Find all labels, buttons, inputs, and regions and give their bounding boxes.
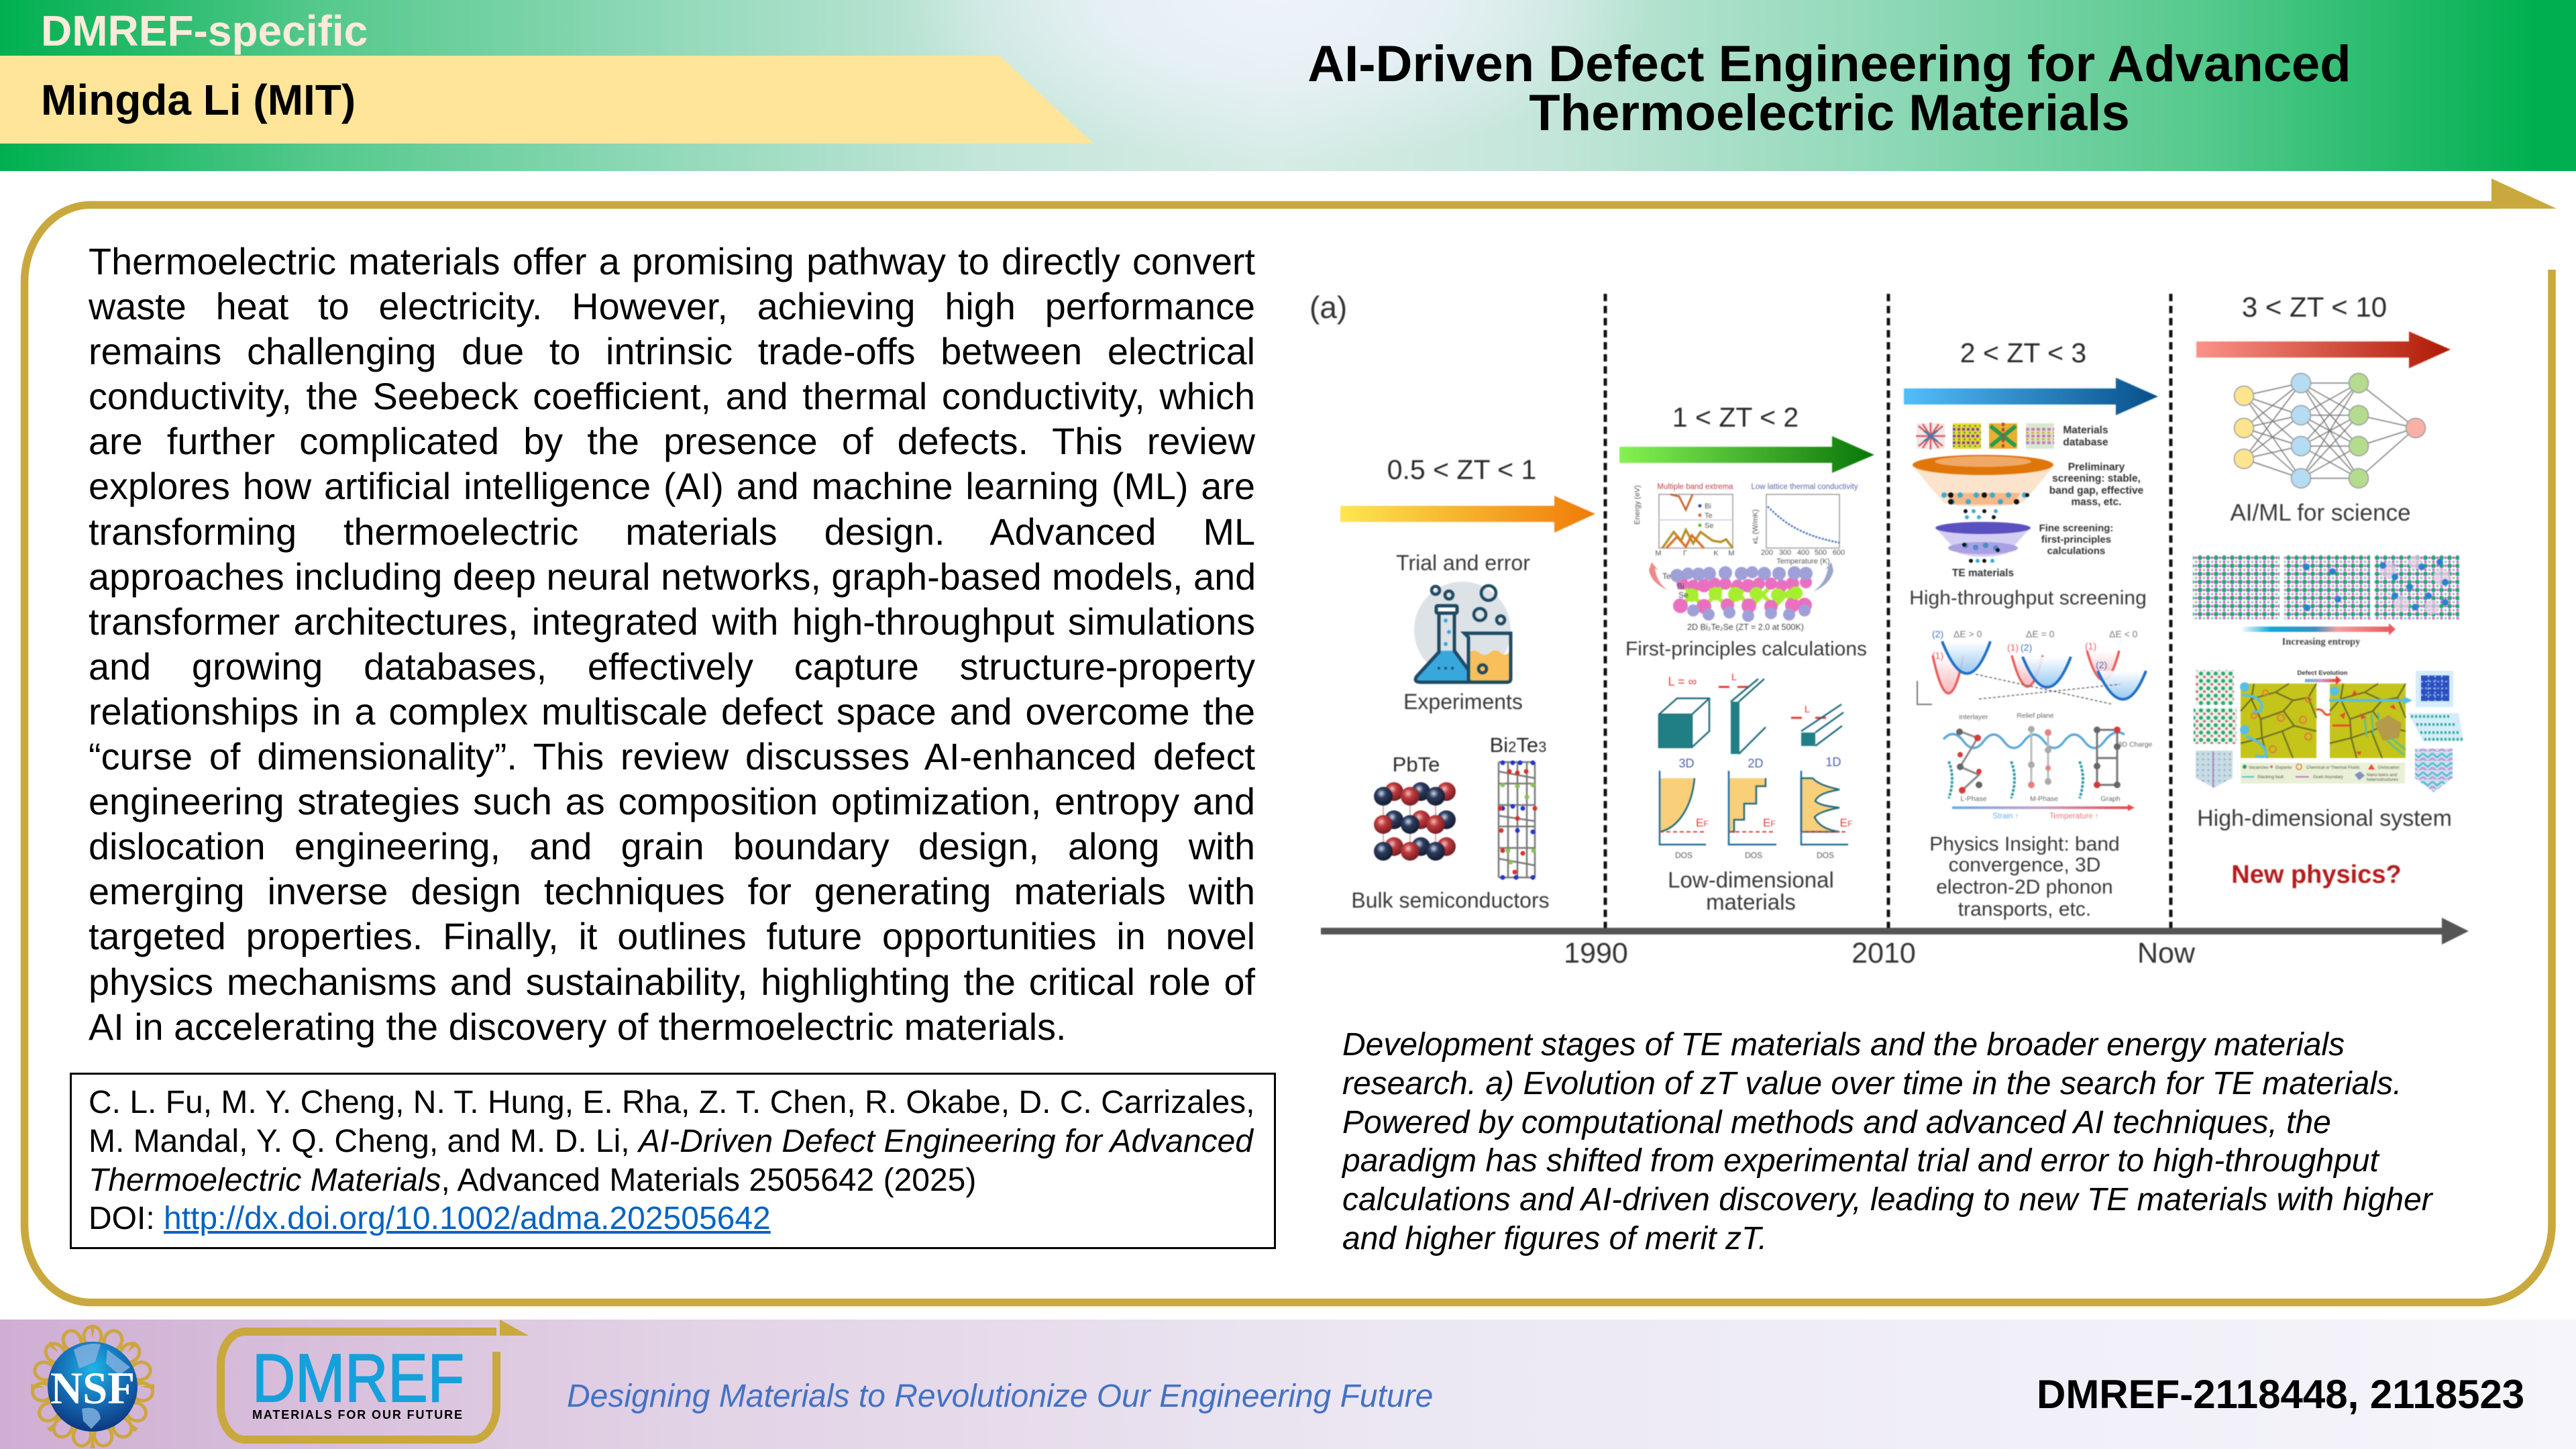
chart: phonon transport chains: L-Phase	[1960, 795, 1987, 803]
label: Bi2Te3: Bi2Te3	[1490, 733, 1546, 757]
footer tagline: Designing Materials to Revolutionize Our Engineering Future	[567, 1379, 1433, 1414]
label: fine screening: calculations	[2047, 545, 2105, 557]
chart: phonon transport chains: M-Phase	[2030, 795, 2058, 803]
title: AI-Driven Defect Engineering for Advanced	[1307, 36, 2351, 93]
arrow: strain and temperature	[1952, 804, 2135, 820]
crystal: 2D Bi2Te2Se structure: Bi	[1677, 582, 1684, 591]
axis years: 2010	[1851, 937, 1916, 969]
chart: DOS 3D: DOS	[1675, 851, 1693, 860]
axis years: Now	[2137, 937, 2196, 969]
icon: 3D bulk: 3D	[1678, 757, 1695, 770]
chart: low lattice thermal conductivity: 600	[1833, 549, 1845, 557]
abstract text block: “curse of dimensionality”. This review discusses AI-enhanced defect	[89, 735, 1255, 777]
label: TE materials: TE materials	[1952, 568, 2014, 579]
chart: low lattice thermal conductivity: 300	[1779, 549, 1791, 557]
era 3: 2 < ZT < 3 arrow: 2 < ZT < 3	[1960, 337, 2086, 368]
abstract text block: explores how artificial intelligence (AI) and machine learning (ML) are	[89, 465, 1255, 507]
chart: DOS 2D: DOS	[1745, 851, 1762, 860]
legend strip: Chemical or Thermal Fluids	[2306, 765, 2360, 770]
era divider lines	[1605, 294, 2171, 929]
chart: phonon transport chains: Relief plane	[2017, 712, 2054, 720]
chart: band convergence parabolas: ΔE > 0	[1953, 629, 1982, 639]
chart: band convergence parabolas: (2)	[2096, 659, 2107, 670]
diagram: right structures	[2408, 671, 2463, 792]
abstract text block: transformer architectures, integrated with high-throughput simulations	[89, 600, 1255, 643]
chart: low lattice thermal conductivity: 200	[1761, 549, 1773, 557]
era 4: 3 < ZT < 10 arrow	[2196, 291, 2451, 368]
label: preliminary screening	[2049, 462, 2144, 508]
chart: band convergence parabolas: (1)	[2085, 641, 2096, 651]
diagram: entropy lattices	[2193, 555, 2459, 620]
presenter band	[0, 56, 1093, 144]
arrow: increasing entropy: Increasing entropy	[2282, 637, 2361, 647]
abstract text block: transforming thermoelectric materials design. Advanced ML	[89, 511, 1255, 553]
icon: DMREF logo: MATERIALS FOR OUR FUTURE	[252, 1408, 462, 1421]
crystal: 2D Bi2Te2Se structure: Te	[1662, 572, 1671, 581]
chart: DOS 3D	[1660, 771, 1709, 860]
era 1: 0.5 < ZT < 1 arrow	[1340, 454, 1595, 533]
chart: multiple band extrema	[1633, 483, 1735, 557]
abstract text block: are further complicated by the presence of defects. This review	[89, 420, 1255, 462]
header highlight glow	[872, 0, 1677, 171]
small arrow: defect evolution: Defect Evolution	[2298, 669, 2348, 677]
caption: 2D structure: 2D Bi₂Te₂Se (ZT = 2.0 at 500K)	[1687, 623, 1804, 632]
label: high-dimensional system: High-dimensional system	[2197, 806, 2452, 831]
label: PbTe: PbTe	[1393, 753, 1440, 776]
title	[1307, 36, 2351, 142]
chart: multiple band extrema: M	[1655, 549, 1662, 557]
chart: DOS 2D: EF	[1763, 816, 1776, 829]
axis years: 1990	[1564, 937, 1628, 969]
chart: multiple band extrema: Γ	[1683, 549, 1687, 557]
award numbers: DMREF-2118448, 2118523	[2037, 1372, 2524, 1417]
citation text: DOI: http://dx.doi.org/10.1002/adma.202505642	[89, 1201, 771, 1236]
crystal: 2D Bi2Te2Se structure: Se	[1678, 590, 1688, 600]
abstract text block: AI in accelerating the discovery of thermoelectric materials.	[89, 1006, 1067, 1048]
label: physics insight: Physics Insight: band	[1929, 833, 2120, 855]
icon: 2D quantum well: 2D	[1748, 757, 1764, 770]
era 1: 0.5 < ZT < 1 arrow: 0.5 < ZT < 1	[1387, 454, 1536, 485]
title: Thermoelectric Materials	[1529, 85, 2130, 142]
chart: band convergence parabolas	[1917, 629, 2146, 704]
legend strip: Stacking fault	[2257, 775, 2284, 780]
label: low-dimensional materials: materials	[1706, 890, 1796, 914]
label: physics insight: convergence, 3D	[1949, 854, 2100, 876]
chart: band convergence parabolas: (2)	[2021, 642, 2032, 653]
citation text: C. L. Fu, M. Y. Cheng, N. T. Hung, E. Rha, Z. T. Chen, R. Okabe, D. C. Carrizales,	[89, 1085, 1254, 1120]
legend strip: Vacancies	[2249, 765, 2269, 770]
chart: phonon transport chains: interlayer	[1959, 713, 1988, 721]
label: bulk semiconductors: Bulk semiconductors	[1351, 888, 1550, 912]
figure caption	[1342, 1027, 2434, 1256]
figure caption: Powered by computational methods and advanced AI techniques, the	[1342, 1105, 2331, 1140]
chart: multiple band extrema: Se	[1705, 522, 1713, 530]
label: preliminary screening: screening: stable,	[2052, 473, 2141, 484]
figure caption: calculations and AI-driven discovery, leading to new TE materials with higher	[1342, 1182, 2432, 1218]
diagram: left defect lattices	[2194, 670, 2237, 788]
icon: 1D quantum wire: 1D	[1825, 755, 1841, 769]
icon: 3D bulk: L = ∞	[1668, 675, 1697, 688]
icon: materials database tiles	[1916, 423, 2054, 449]
label: fine screening: first-principles	[2041, 534, 2111, 545]
icon: 2D quantum well: L	[1731, 672, 1737, 683]
label: low-dimensional materials	[1668, 867, 1834, 914]
abstract text block: Thermoelectric materials offer a promising pathway to directly convert	[89, 240, 1255, 282]
chart: low lattice thermal conductivity	[1751, 483, 1858, 566]
citation text: M. Mandal, Y. Q. Cheng, and M. D. Li, AI-Driven Defect Engineering for Advanced	[89, 1124, 1253, 1159]
label: materials database: Materials	[2063, 425, 2108, 436]
icon: 1D quantum wire	[1791, 704, 1843, 769]
legend strip: Dopants	[2275, 765, 2292, 770]
chart: band convergence parabolas: (2)	[1932, 629, 1943, 639]
icon: NSF logo: NSF	[50, 1362, 135, 1413]
figure caption: Development stages of TE materials and the broader energy materials	[1342, 1027, 2345, 1063]
chart: low lattice thermal conductivity: Low lattice thermal conductivity	[1751, 483, 1858, 491]
abstract text block: waste heat to electricity. However, achieving high performance	[89, 285, 1255, 327]
label: experiments: Experiments	[1403, 690, 1523, 714]
chart: multiple band extrema: Te	[1705, 512, 1713, 520]
label: AI/ML for science: AI/ML for science	[2230, 500, 2411, 526]
label: low-dimensional materials: Low-dimensional	[1668, 867, 1834, 892]
label: preliminary screening: mass, etc.	[2072, 496, 2121, 508]
legend strip: Grain boundary	[2313, 775, 2344, 780]
presenter name: Mingda Li (MIT)	[41, 76, 356, 124]
legend strip	[2241, 763, 2405, 784]
icon: DMREF logo: DMREF	[252, 1341, 464, 1416]
abstract text block: approaches including deep neural networks, graph-based models, and	[89, 555, 1256, 598]
small arrow: defect evolution	[2298, 669, 2348, 685]
crystal: Bi2Te3 lattice	[1497, 761, 1538, 880]
chart: multiple band extrema: M	[1728, 549, 1735, 557]
icon: screening funnel	[1913, 455, 2053, 563]
diagram: grain boundary panels	[2240, 682, 2412, 758]
citation text	[89, 1085, 1254, 1236]
abstract text block: physics mechanisms and sustainability, highlighting the critical role of	[89, 961, 1255, 1002]
chart: phonon transport chains: 3D Charge	[2118, 741, 2153, 749]
chart: band convergence parabolas: ΔE = 0	[2026, 629, 2055, 639]
label: preliminary screening: band gap, effective	[2049, 485, 2144, 496]
label: new physics: New physics?	[2231, 861, 2402, 889]
era 2: 1 < ZT < 2 arrow	[1619, 402, 1874, 473]
figure caption: paradigm has shifted from experimental trial and error to high-throughput	[1342, 1143, 2379, 1179]
icon: DMREF logo	[221, 1320, 529, 1440]
abstract text block: dislocation engineering, and grain boundary design, along with	[89, 825, 1255, 867]
crystal: 2D Bi2Te2Se structure	[1649, 562, 1833, 622]
arrow: strain and temperature: Strain ↑	[1992, 812, 2019, 820]
chart: band convergence parabolas: (1)	[2007, 642, 2019, 653]
chart: band convergence parabolas: ΔE < 0	[2109, 629, 2138, 639]
abstract text block: and growing databases, effectively capture structure-property	[89, 645, 1255, 688]
era 2: 1 < ZT < 2 arrow: 1 < ZT < 2	[1672, 402, 1799, 433]
citation box	[70, 1073, 1276, 1249]
label: fine screening	[2039, 523, 2113, 557]
header banner	[0, 0, 2576, 171]
legend strip: Nano-twins and	[2367, 773, 2398, 777]
chart: multiple band extrema: Bi	[1705, 502, 1711, 511]
chart: DOS 3D: EF	[1696, 816, 1709, 829]
arrow: increasing entropy	[2241, 623, 2396, 647]
icon: 3D bulk	[1659, 675, 1709, 770]
icon: 2D quantum well	[1719, 672, 1766, 770]
chart: low lattice thermal conductivity: κL (W/mK)	[1752, 509, 1760, 544]
abstract text block	[89, 240, 1256, 1048]
label: physics insight: transports, etc.	[1958, 898, 2091, 920]
chart: low lattice thermal conductivity: 400	[1797, 549, 1809, 557]
arrow: strain and temperature: Temperature ↑	[2049, 812, 2099, 820]
citation text: Thermoelectric Materials, Advanced Materials 2505642 (2025)	[89, 1163, 976, 1198]
icon: NSF logo	[31, 1325, 154, 1448]
icon: flask and beaker	[1414, 582, 1511, 682]
chart: low lattice thermal conductivity: Temperature (K)	[1776, 557, 1830, 566]
label: materials database: database	[2063, 437, 2108, 448]
abstract text block: conductivity, the Seebeck coefficient, and thermal conductivity, which	[89, 375, 1255, 417]
legend strip: heterostructures	[2367, 777, 2399, 782]
abstract text block: engineering strategies such as composition optimization, entropy and	[89, 780, 1255, 822]
chart: band convergence parabolas: (1)	[1932, 650, 1943, 661]
label: high-throughput screening: High-throughput screening	[1909, 587, 2147, 609]
chart: multiple band extrema: Energy (eV)	[1633, 485, 1642, 525]
abstract text block: targeted properties. Finally, it outlines future opportunities in novel	[89, 915, 1255, 957]
label: DMREF-specific: DMREF-specific	[41, 7, 368, 55]
era 3: 2 < ZT < 3 arrow	[1904, 337, 2158, 415]
chart: phonon transport chains	[1943, 712, 2153, 803]
chart: DOS 2D	[1729, 771, 1776, 860]
diagram: neural network	[2234, 373, 2426, 488]
chart: DOS 1D: DOS	[1817, 851, 1834, 860]
label: fine screening: Fine screening:	[2039, 523, 2113, 534]
axis years	[1564, 937, 2196, 969]
chart: multiple band extrema: K	[1713, 549, 1719, 557]
chart: multiple band extrema: Multiple band extrema	[1657, 483, 1733, 491]
label: first-principles calculations: First-principles calculations	[1625, 638, 1867, 660]
abstract text block: remains challenging due to intrinsic trade-offs between electrical	[89, 330, 1255, 372]
chart: phonon transport chains: Graph	[2100, 795, 2121, 803]
chart: low lattice thermal conductivity: 500	[1815, 549, 1827, 557]
era 4: 3 < ZT < 10 arrow: 3 < ZT < 10	[2242, 291, 2387, 323]
icon: 1D quantum wire: L	[1805, 704, 1810, 715]
figure caption: and higher figures of merit zT.	[1342, 1221, 1767, 1256]
timeline axis arrow	[1321, 918, 2469, 945]
label: trial and error: Trial and error	[1396, 551, 1530, 575]
legend strip: Dislocation	[2378, 765, 2400, 770]
figure caption: research. a) Evolution of zT value over time in the search for TE materials.	[1342, 1066, 2402, 1102]
abstract text block: emerging inverse design techniques for generating materials with	[89, 870, 1255, 912]
label: physics insight	[1929, 833, 2120, 920]
crystal: PbTe atoms	[1374, 782, 1456, 861]
footer band	[0, 1320, 2576, 1449]
label: physics insight: electron-2D phonon	[1936, 876, 2113, 898]
abstract text block: relationships in a complex multiscale defect space and overcome the	[89, 690, 1255, 733]
label: materials database	[2063, 425, 2108, 448]
label: preliminary screening: Preliminary	[2068, 462, 2125, 473]
panel label (a): (a)	[1309, 290, 1347, 325]
chart: DOS 1D	[1801, 771, 1852, 860]
chart: DOS 1D: EF	[1840, 816, 1852, 829]
